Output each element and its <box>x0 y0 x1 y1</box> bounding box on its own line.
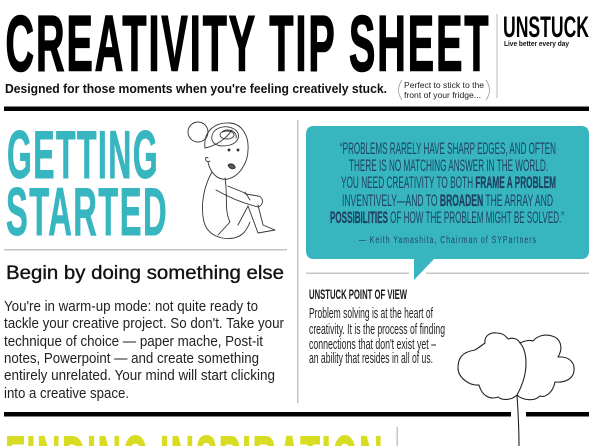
speech bubble <box>306 126 589 280</box>
note: fridge callout: Perfect to stick to the <box>404 80 484 90</box>
note: fridge callout: front of your fridge... <box>404 90 481 100</box>
heading: UNSTUCK POINT OF VIEW <box>309 287 407 302</box>
body text: You're in warm-up mode: not quite ready to <box>4 298 258 315</box>
body text: into a creative space. <box>4 385 129 402</box>
panel: getting started <box>4 117 287 402</box>
note: fridge callout <box>398 80 490 100</box>
section rule <box>4 412 589 416</box>
body text <box>309 305 445 367</box>
body text: technique of choice — paper mache, Post-it <box>4 333 264 350</box>
header <box>5 0 589 100</box>
body text: creativity. It is the process of finding <box>309 321 445 338</box>
heading: getting started <box>6 117 168 250</box>
illustration: cloud tree <box>458 333 574 446</box>
logo: Unstuck: Live better every day <box>504 41 569 48</box>
body text: notes, Powerpoint — and create something <box>4 350 259 367</box>
body text: Problem solving is at the heart of <box>309 305 433 322</box>
panel: getting started: STARTED <box>6 174 168 250</box>
subheading: Begin by doing something else <box>6 263 284 284</box>
quote text <box>330 139 564 227</box>
body text: entirely unrelated. Your mind will start clicking <box>4 367 275 384</box>
body text: connections that don't exist yet – <box>309 336 436 353</box>
body text <box>4 298 284 402</box>
panel: getting started: GETTING <box>7 117 159 193</box>
subtitle: Designed for those moments when you're feeling creatively stuck. <box>5 81 387 96</box>
panel: unstuck point of view <box>309 287 445 367</box>
illustration: seated girl <box>188 122 275 238</box>
body text: tackle your creative project. So don't. Take your <box>4 315 284 332</box>
panel: quote bubble <box>306 126 589 280</box>
body text: an ability that resides in all of us. <box>309 350 433 367</box>
